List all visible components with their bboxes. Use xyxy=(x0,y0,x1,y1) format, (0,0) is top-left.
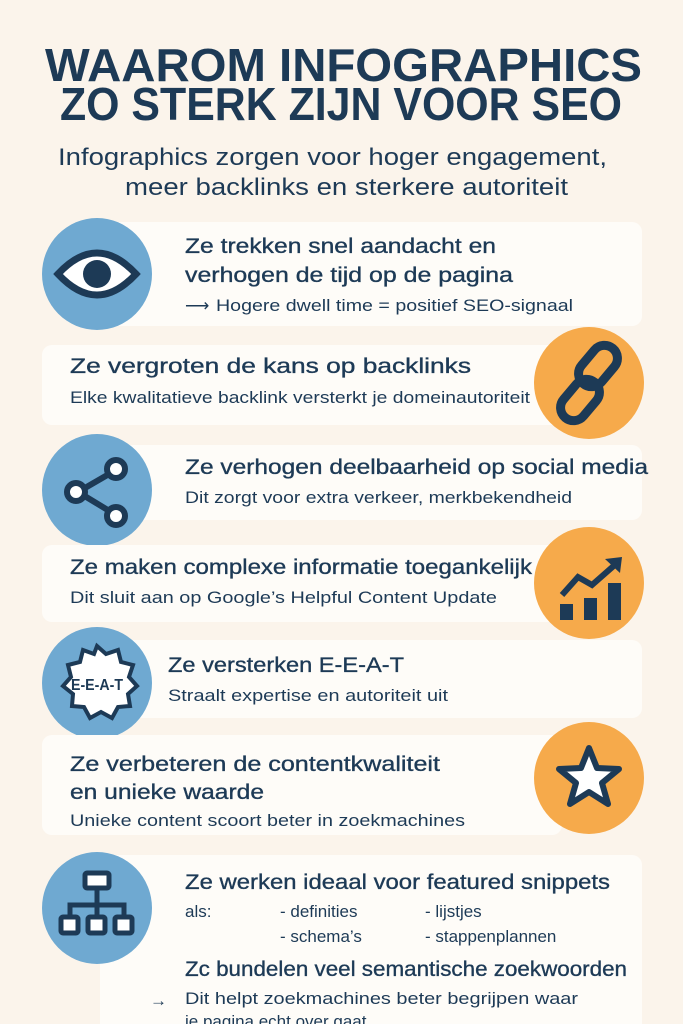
panel: card 1 attention: Hogere dwell time = positief SEO-signaal xyxy=(216,296,573,315)
panel: card 1 attention: Ze trekken snel aandacht en xyxy=(185,235,496,258)
title xyxy=(45,39,642,130)
panel: card 4 complex info: Dit sluit aan op Google’s Helpful Content Update xyxy=(70,588,497,607)
icon: chain link xyxy=(534,327,644,439)
icon: EEAT badge xyxy=(42,627,152,739)
icon: eye xyxy=(42,218,152,330)
panel: card 5 EEAT xyxy=(100,640,642,718)
panel: card 7 featured snippets: - stappenplannen xyxy=(425,927,556,946)
icon: EEAT badge: E-E-A-T xyxy=(71,677,123,694)
subtitle xyxy=(58,144,607,201)
panel: card 7 featured snippets: - definities xyxy=(280,902,357,921)
panel: card 6 quality: en unieke waarde xyxy=(70,781,264,804)
panel: card 1 attention: ⟶ xyxy=(185,296,209,315)
panel: card 5 EEAT: Ze versterken E-E-A-T xyxy=(168,654,404,677)
title: ZO STERK ZIJN VOOR SEO xyxy=(60,78,622,130)
panel: card 7 featured snippets: Dit helpt zoekmachines beter begrijpen waar xyxy=(185,989,578,1008)
panel: card 7 featured snippets: - lijstjes xyxy=(425,902,482,921)
panel: card 1 attention: verhogen de tijd op de pagina xyxy=(185,264,513,287)
panel: card 1 attention xyxy=(100,222,642,326)
panel: card 6 quality xyxy=(42,735,562,835)
panel: card 3 social: Ze verhogen deelbaarheid op social media xyxy=(185,456,648,479)
title: WAAROM INFOGRAPHICS xyxy=(45,39,642,91)
panel: card 7 featured snippets: - schema’s xyxy=(280,927,362,946)
panel: card 7 featured snippets xyxy=(100,855,642,1024)
panel: card 6 quality: Ze verbeteren de contentkwaliteit xyxy=(70,753,440,776)
icon: growth chart xyxy=(534,527,644,639)
panel: card 7 featured snippets: → xyxy=(150,991,167,1010)
subtitle: Infographics zorgen voor hoger engagement, xyxy=(58,144,607,171)
icon: star xyxy=(534,722,644,834)
panel: card 7 featured snippets: Zc bundelen veel semantische zoekwoorden xyxy=(185,958,627,981)
panel: card 7 featured snippets: Ze werken ideaal voor featured snippets xyxy=(185,871,610,894)
panel: card 2 backlinks: Elke kwalitatieve backlink versterkt je domeinautoriteit xyxy=(70,388,530,407)
panel: card 4 complex info xyxy=(42,545,562,622)
panel: card 3 social: Dit zorgt voor extra verkeer, merkbekendheid xyxy=(185,488,572,507)
panel: card 7 featured snippets: als: xyxy=(185,902,211,921)
panel: card 6 quality: Unieke content scoort beter in zoekmachines xyxy=(70,811,465,830)
icon: share xyxy=(42,434,152,546)
subtitle: meer backlinks en sterkere autoriteit xyxy=(125,174,568,201)
panel: card 2 backlinks xyxy=(42,345,632,425)
panel: card 5 EEAT: Straalt expertise en autoriteit uit xyxy=(168,686,448,705)
panel: card 4 complex info: Ze maken complexe informatie toegankelijk xyxy=(70,556,533,579)
panel: card 3 social xyxy=(100,445,648,520)
panel: card 2 backlinks: Ze vergroten de kans op backlinks xyxy=(70,355,471,378)
icon: hierarchy xyxy=(42,852,152,964)
